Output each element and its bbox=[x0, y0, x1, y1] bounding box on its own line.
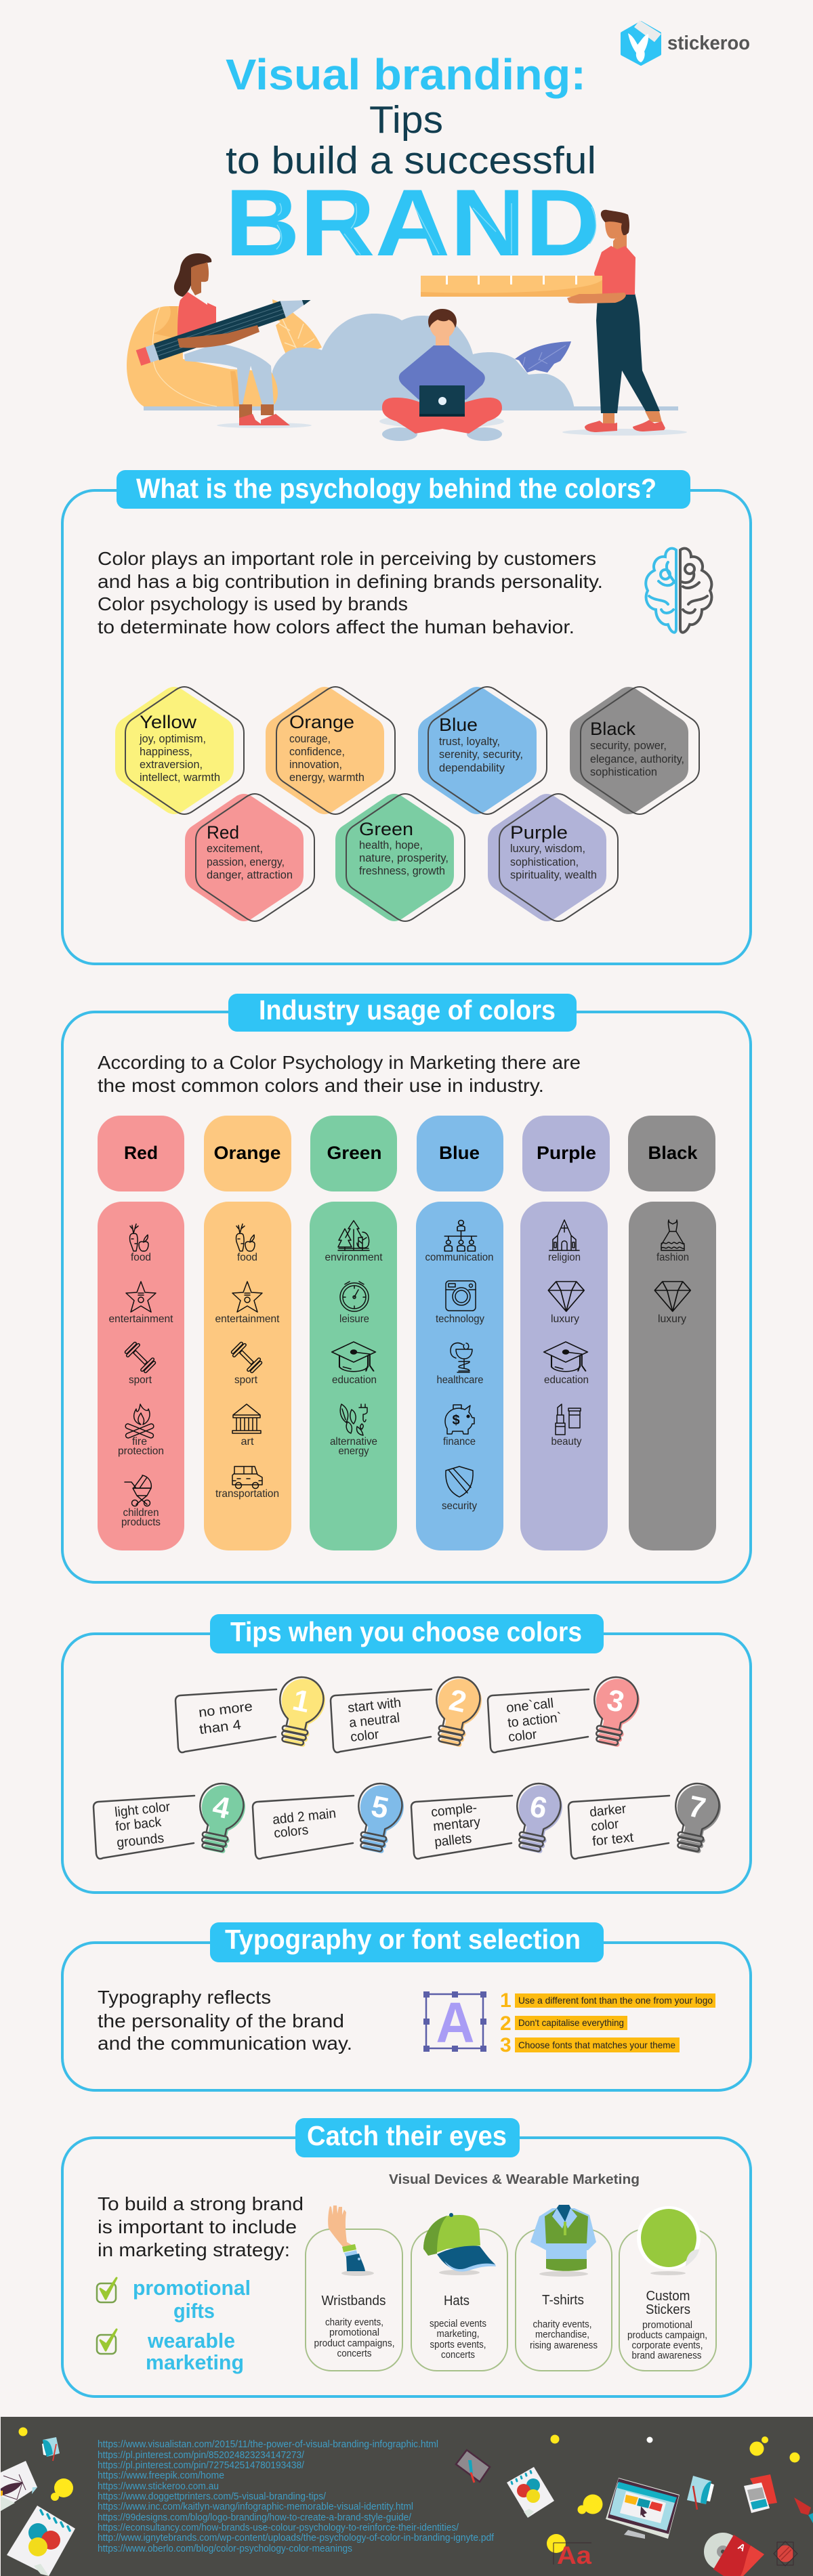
man neck and face bbox=[430, 318, 455, 347]
column: Orange: transportation bbox=[215, 1488, 279, 1500]
footer background bbox=[1, 2417, 813, 2576]
hexagon: Yellow bbox=[115, 687, 244, 814]
source links: https://pl.pinterest.com/pin/852024823234147273/ bbox=[98, 2449, 305, 2461]
intro text: and has a big contribution in defining brands personality. bbox=[98, 571, 603, 592]
hexagon: Blue bbox=[418, 687, 547, 814]
icon: brain bbox=[646, 549, 711, 633]
hexagon: Blue: Blue bbox=[439, 715, 478, 735]
icon: pen tool paper left bbox=[1, 2461, 37, 2511]
subheading: Visual Devices & Wearable Marketing bbox=[389, 2172, 640, 2187]
BRAND highlights bbox=[276, 203, 596, 255]
hexagon: Black: Black bbox=[590, 719, 635, 739]
man feet bbox=[382, 427, 502, 441]
icon: education bbox=[544, 1342, 587, 1372]
panel: typography bbox=[62, 1922, 751, 2090]
woman face and neck bbox=[191, 262, 209, 295]
font tip 1: Use a different font than the one from your logo bbox=[518, 1995, 713, 2006]
image: polo shirt bbox=[530, 2205, 596, 2277]
icon: letter A selection frame: A bbox=[436, 1991, 474, 2054]
tip 5: 5 bbox=[369, 1790, 392, 1825]
icon: CD and box bbox=[704, 2533, 764, 2576]
hexagon: Yellow: intellect, warmth bbox=[140, 771, 220, 784]
column: Purple: education bbox=[544, 1374, 589, 1386]
font tip 2 bbox=[500, 2012, 627, 2035]
tip 2: 2 bbox=[446, 1683, 470, 1719]
title line: to build a successful: to build a successful bbox=[226, 139, 596, 182]
tip 7: 7 bbox=[686, 1790, 709, 1825]
column: Blue: finance bbox=[443, 1436, 476, 1448]
card: hats bbox=[411, 2213, 507, 2371]
intro text: According to a Color Psychology in Marketing there are bbox=[98, 1052, 581, 1073]
icon: tablet bbox=[456, 2450, 490, 2483]
icon: education bbox=[332, 1342, 375, 1372]
icon: color notebook left bbox=[7, 2506, 75, 2576]
column: Green: leisure bbox=[339, 1313, 369, 1325]
source links: https://www.oberlo.com/blog/color-psychology-color-meanings bbox=[98, 2543, 352, 2554]
tip 5 bbox=[253, 1779, 408, 1859]
hexagon: Black bbox=[570, 687, 699, 814]
woman hair bbox=[174, 253, 211, 297]
item: promotional gifts: promotional bbox=[133, 2276, 251, 2300]
panel border bbox=[62, 2138, 751, 2396]
tip 2: a neutral bbox=[348, 1710, 400, 1731]
standing man shadow bbox=[562, 429, 687, 436]
icon: beauty bbox=[556, 1404, 581, 1435]
card description: promotional bbox=[329, 2327, 379, 2338]
purple leaf bbox=[515, 341, 571, 373]
laptop bbox=[419, 385, 465, 417]
icon: book right bbox=[687, 2476, 714, 2510]
icon: CD and box: A bbox=[736, 2541, 747, 2554]
column: Red: protection bbox=[118, 1445, 164, 1457]
card description bbox=[530, 2319, 598, 2351]
hexagon: Yellow: happiness, bbox=[140, 745, 192, 758]
column: Green: energy bbox=[339, 1445, 369, 1457]
standing man shirt bbox=[594, 246, 635, 295]
heading: Typography or font selection bbox=[225, 1924, 581, 1955]
tip 2 bbox=[331, 1673, 486, 1752]
column: Green bbox=[310, 1116, 397, 1550]
icon: stroller bbox=[125, 1475, 151, 1506]
image: wrist bbox=[328, 2205, 374, 2276]
card description: charity events, bbox=[325, 2317, 383, 2328]
standing man face bbox=[605, 221, 623, 238]
font tip 1: 1 bbox=[500, 1989, 512, 2012]
icon: pen right bbox=[794, 2497, 813, 2523]
standing man arm bbox=[567, 293, 626, 303]
font tip 1 bbox=[500, 1989, 715, 2012]
source links: https://99designs.com/blog/logo-branding/how-to-create-a-brand-style-guide/ bbox=[98, 2512, 412, 2523]
tip 7: color bbox=[590, 1817, 620, 1834]
body text: is important to include bbox=[98, 2216, 297, 2237]
intro text: the most common colors and their use in industry. bbox=[98, 1075, 544, 1096]
column: Purple: luxury bbox=[551, 1313, 579, 1325]
source links: https://www.freepik.com/home bbox=[98, 2470, 224, 2481]
hexagon: Purple: sophistication, bbox=[510, 856, 579, 868]
icon: fire bbox=[125, 1404, 154, 1439]
tip 4: grounds bbox=[116, 1831, 165, 1851]
column: Orange: entertainment bbox=[215, 1313, 280, 1325]
card: custom stickers bbox=[619, 2206, 716, 2371]
card description: merchandise, bbox=[535, 2329, 589, 2340]
hexagon: Red: excitement, bbox=[207, 842, 263, 855]
card description: corporate events, bbox=[631, 2340, 703, 2351]
hexagon: Green: freshness, growth bbox=[359, 864, 445, 877]
tip 3: one`call bbox=[505, 1696, 554, 1716]
woman with pencil bbox=[136, 253, 314, 428]
footer bbox=[1, 2417, 813, 2576]
tip 6: comple- bbox=[430, 1800, 478, 1820]
icon: luxury bbox=[548, 1282, 584, 1311]
man legs bbox=[382, 398, 502, 434]
body text: and the communication way. bbox=[98, 2033, 352, 2054]
column: Red: food bbox=[131, 1252, 151, 1263]
hexagon: Yellow: joy, optimism, bbox=[139, 732, 206, 745]
image: cap bbox=[423, 2213, 496, 2275]
icon: entertainment bbox=[126, 1282, 156, 1312]
hexagon: Blue: dependability bbox=[439, 761, 505, 774]
illustration: hero scene bbox=[127, 203, 687, 441]
column: Blue bbox=[416, 1116, 503, 1550]
icon: fashion bbox=[661, 1220, 684, 1250]
column: Orange: food bbox=[237, 1252, 257, 1263]
hexagon: Orange: confidence, bbox=[289, 745, 345, 758]
column: Black: luxury bbox=[658, 1313, 686, 1325]
icon: sport bbox=[230, 1340, 264, 1374]
icon: technology bbox=[446, 1281, 476, 1311]
icon: small book left bbox=[42, 2437, 60, 2461]
tip 3 bbox=[488, 1673, 644, 1752]
heading: What is the psychology behind the colors? bbox=[136, 473, 656, 504]
hexagon: Purple: luxury, wisdom, bbox=[510, 842, 585, 855]
standing man with ruler bbox=[421, 210, 687, 436]
icon: monitor bbox=[606, 2478, 680, 2539]
icon: security bbox=[446, 1466, 473, 1497]
yellow leaf bbox=[272, 299, 322, 359]
tip 7: darker bbox=[589, 1801, 627, 1820]
card description: brand awareness bbox=[631, 2350, 702, 2361]
tip 6: mentary bbox=[432, 1815, 481, 1834]
source links: https://pl.pinterest.com/pin/727542514780193438/ bbox=[98, 2459, 305, 2471]
Aa type sample: Aa bbox=[557, 2541, 591, 2569]
standing man shoes bbox=[585, 420, 665, 432]
hexagon: Black: sophistication bbox=[590, 765, 657, 778]
font tip 3 bbox=[500, 2034, 680, 2056]
icon: leisure bbox=[340, 1282, 369, 1311]
tip 7: for text bbox=[591, 1830, 635, 1849]
column: Red: entertainment bbox=[108, 1313, 173, 1325]
column: Purple: Purple bbox=[537, 1143, 596, 1163]
panel: tips bbox=[62, 1614, 751, 1893]
icon: alternative energy bbox=[340, 1404, 367, 1435]
title line: Visual branding: Visual branding: bbox=[226, 50, 586, 99]
icon: religion bbox=[549, 1220, 579, 1250]
panel: industry usage bbox=[62, 994, 751, 1582]
tip 3: to action` bbox=[507, 1710, 562, 1731]
panel: catch their eyes bbox=[62, 2118, 751, 2396]
column: Red: children bbox=[123, 1507, 159, 1519]
column: Purple: beauty bbox=[551, 1436, 581, 1448]
tip 4: light color bbox=[114, 1799, 171, 1820]
heading: Industry usage of colors bbox=[259, 994, 556, 1026]
logo wordmark: stickeroo bbox=[667, 33, 750, 54]
body text: Typography reflects bbox=[98, 1987, 271, 2008]
column: Orange: sport bbox=[234, 1374, 258, 1386]
column: Purple bbox=[520, 1116, 610, 1550]
logo: stickeroo bbox=[622, 20, 750, 64]
standing man skin bbox=[603, 222, 662, 423]
card description: product campaigns, bbox=[314, 2338, 394, 2349]
hexagon: Red bbox=[185, 794, 314, 921]
intro text bbox=[98, 548, 603, 637]
man shadow bbox=[379, 415, 504, 428]
hexagon: Green: nature, prosperity, bbox=[359, 851, 449, 864]
column: Red: products bbox=[121, 1517, 161, 1528]
card title: Wristbands bbox=[321, 2294, 386, 2308]
hexagon: Red: passion, energy, bbox=[207, 856, 285, 868]
font tip 3: 3 bbox=[500, 2034, 512, 2056]
man hair bbox=[428, 309, 457, 328]
ruler bbox=[421, 276, 602, 297]
icon: red book and paper bbox=[744, 2474, 777, 2513]
heading: Catch their eyes bbox=[307, 2120, 507, 2151]
hexagon: Red: danger, attraction bbox=[207, 868, 293, 881]
item: wearable marketing: wearable bbox=[147, 2329, 235, 2352]
card title: Hats bbox=[444, 2294, 470, 2308]
panel border bbox=[62, 1012, 751, 1582]
card description bbox=[627, 2319, 707, 2361]
tip 7 bbox=[568, 1779, 725, 1859]
column: Green: education bbox=[332, 1374, 377, 1386]
tip 6: pallets bbox=[434, 1831, 472, 1850]
column: Red: sport bbox=[129, 1374, 152, 1386]
card description: concerts bbox=[337, 2348, 371, 2359]
card description: sports events, bbox=[430, 2339, 486, 2350]
column: Red bbox=[98, 1116, 184, 1550]
icon: food bbox=[130, 1224, 148, 1251]
source links: https://www.visualistan.com/2015/11/the-power-of-visual-branding-infographic.html bbox=[98, 2438, 438, 2450]
hexagon: Yellow: extraversion, bbox=[140, 758, 203, 771]
column: Blue: Blue bbox=[439, 1143, 480, 1163]
pencil bbox=[136, 292, 314, 366]
hexagon: Purple bbox=[488, 794, 618, 921]
panel border bbox=[62, 1943, 751, 2090]
hexagon: Yellow: Yellow bbox=[140, 712, 197, 732]
icon: environment bbox=[338, 1221, 369, 1250]
font tip 3: Choose fonts that matches your theme bbox=[518, 2040, 675, 2050]
column: Purple: religion bbox=[548, 1252, 581, 1263]
tip 6 bbox=[411, 1779, 566, 1859]
source links: https://econsultancy.com/how-brands-use-colour-psychology-to-reinforce-their-identities/ bbox=[98, 2522, 459, 2533]
icon: color notebook middle bbox=[507, 2467, 554, 2518]
icon: hatched vector shape bbox=[774, 2541, 797, 2566]
intro text bbox=[98, 1052, 581, 1096]
woman pants bbox=[184, 343, 274, 404]
intro text: to determinate how colors affect the human behavior. bbox=[98, 616, 575, 637]
item: promotional gifts bbox=[97, 2276, 251, 2323]
item: wearable marketing bbox=[97, 2329, 244, 2374]
source links: http://www.ignytebrands.com/wp-content/uploads/the-psychology-of-color-in-branding-ignyte.pdf bbox=[98, 2532, 495, 2543]
column: Black: fashion bbox=[656, 1252, 689, 1263]
card: wristbands bbox=[306, 2205, 402, 2371]
card description: charity events, bbox=[533, 2319, 592, 2330]
column: Orange: art bbox=[241, 1436, 254, 1448]
tip 4: for back bbox=[114, 1815, 163, 1834]
column: Orange: Orange bbox=[214, 1143, 280, 1163]
ground line bbox=[144, 406, 678, 410]
standing man hair bbox=[601, 210, 629, 235]
hexagon: Green: health, hope, bbox=[359, 839, 423, 851]
body text: the personality of the brand bbox=[98, 2010, 344, 2031]
icon: luxury bbox=[654, 1282, 690, 1311]
image: round sticker bbox=[637, 2206, 701, 2275]
column: Blue: technology bbox=[436, 1313, 484, 1325]
woman shoes and legs bbox=[217, 404, 312, 428]
body text: in marketing strategy: bbox=[98, 2239, 290, 2260]
item: promotional gifts: gifts bbox=[173, 2299, 215, 2323]
hexagon: Blue: serenity, security, bbox=[439, 748, 523, 761]
hexagon: Black: security, power, bbox=[590, 739, 667, 752]
tip 4: 4 bbox=[210, 1790, 233, 1825]
tip 1: 1 bbox=[290, 1683, 313, 1719]
card description: concerts bbox=[441, 2349, 475, 2361]
card description bbox=[430, 2318, 486, 2361]
tip 2: start with bbox=[347, 1695, 402, 1716]
tip 5: add 2 main bbox=[272, 1806, 337, 1828]
body text bbox=[98, 1987, 352, 2054]
tip 1: no more bbox=[198, 1699, 253, 1720]
title line: Tips: Tips bbox=[369, 98, 443, 142]
column: Red: Red bbox=[124, 1143, 158, 1163]
cloud bbox=[272, 314, 575, 410]
column: Orange bbox=[204, 1116, 291, 1550]
intro text: Color plays an important role in perceiving by customers bbox=[98, 548, 596, 569]
icon: letter A selection frame bbox=[423, 1991, 486, 2054]
hexagon: Orange: courage, bbox=[289, 732, 331, 745]
yellow dots bbox=[19, 2428, 799, 2553]
hexagon: Orange: Orange bbox=[289, 712, 354, 732]
hexagon: Orange bbox=[266, 687, 395, 814]
panel: psychology of colors bbox=[62, 470, 751, 964]
tip 1 bbox=[175, 1673, 329, 1752]
heading: Tips when you choose colors bbox=[230, 1616, 582, 1647]
tip 3: 3 bbox=[604, 1683, 627, 1719]
card title: Stickers bbox=[646, 2302, 690, 2317]
font tip 2: Don't capitalise everything bbox=[518, 2017, 624, 2028]
panel border bbox=[62, 1634, 751, 1893]
beanbag bbox=[127, 306, 278, 406]
hexagon: Blue: trust, loyalty, bbox=[439, 735, 500, 748]
tip 5: colors bbox=[273, 1823, 309, 1841]
card description: promotional bbox=[642, 2319, 692, 2331]
body text bbox=[98, 2193, 304, 2260]
icon: healthcare bbox=[451, 1343, 472, 1372]
hexagon: Orange: innovation, bbox=[289, 758, 342, 771]
column: Green: Green bbox=[327, 1143, 382, 1163]
title bbox=[225, 50, 600, 276]
icon: sport bbox=[123, 1340, 157, 1374]
man sweater bbox=[399, 345, 485, 400]
icon: food bbox=[236, 1224, 255, 1251]
card description: products campaign, bbox=[627, 2329, 707, 2341]
source links: https://www.stickeroo.com.au bbox=[98, 2480, 219, 2492]
icon: finance: $ bbox=[452, 1413, 460, 1428]
card: t-shirts bbox=[516, 2205, 612, 2371]
tip 1: than 4 bbox=[199, 1718, 242, 1737]
icon: finance bbox=[445, 1405, 474, 1434]
card description: special events bbox=[430, 2318, 486, 2329]
source links: https://www.doggettprinters.com/5-visual-branding-tips/ bbox=[98, 2491, 327, 2502]
body text: To build a strong brand bbox=[98, 2193, 304, 2214]
woman arm bbox=[178, 325, 259, 348]
item: wearable marketing: marketing bbox=[146, 2350, 244, 2374]
icon: communication bbox=[444, 1221, 477, 1251]
hexagon: Green: Green bbox=[359, 819, 413, 839]
card description: rising awareness bbox=[530, 2340, 598, 2351]
card description bbox=[314, 2317, 394, 2359]
font tip 2: 2 bbox=[500, 2012, 512, 2035]
panel border bbox=[62, 490, 751, 964]
card title: T-shirts bbox=[542, 2293, 584, 2308]
title line: BRAND: BRAND bbox=[225, 169, 600, 276]
column: Green: alternative bbox=[330, 1436, 377, 1448]
hexagon: Green bbox=[335, 794, 465, 921]
tip 4 bbox=[93, 1779, 249, 1859]
woman shirt bbox=[178, 292, 216, 339]
source links bbox=[98, 2438, 495, 2554]
intro text: Color psychology is used by brands bbox=[98, 593, 408, 614]
column: Black: Black bbox=[648, 1143, 698, 1163]
hexagon: Purple: Purple bbox=[510, 822, 568, 843]
hexagon: Orange: energy, warmth bbox=[289, 771, 364, 784]
hexagon: Black: elegance, authority, bbox=[590, 753, 684, 765]
seated man with laptop bbox=[379, 309, 504, 441]
card title: Custom bbox=[646, 2289, 690, 2304]
icon: art bbox=[232, 1404, 261, 1433]
tip 6: 6 bbox=[527, 1790, 550, 1825]
icon: entertainment bbox=[232, 1282, 262, 1312]
column: Red: fire bbox=[132, 1436, 147, 1448]
icon: car bbox=[232, 1466, 262, 1489]
column: Blue: security bbox=[442, 1500, 477, 1512]
tip 3: color bbox=[507, 1727, 538, 1745]
column: Blue: communication bbox=[425, 1252, 493, 1263]
column: Black bbox=[628, 1116, 716, 1550]
card description: marketing, bbox=[436, 2328, 480, 2340]
icon: kangaroo hexagon bbox=[622, 20, 661, 64]
standing man pants bbox=[596, 293, 660, 413]
source links: https://www.inc.com/kaitlyn-wang/infographic-memorable-visual-identity.html bbox=[98, 2501, 413, 2512]
column: Blue: healthcare bbox=[436, 1374, 484, 1386]
hexagon: Red: Red bbox=[207, 822, 239, 843]
card title bbox=[646, 2289, 690, 2317]
hexagon: Purple: spirituality, wealth bbox=[510, 868, 597, 881]
column: Green: environment bbox=[325, 1252, 383, 1263]
tip 2: color bbox=[350, 1727, 380, 1745]
